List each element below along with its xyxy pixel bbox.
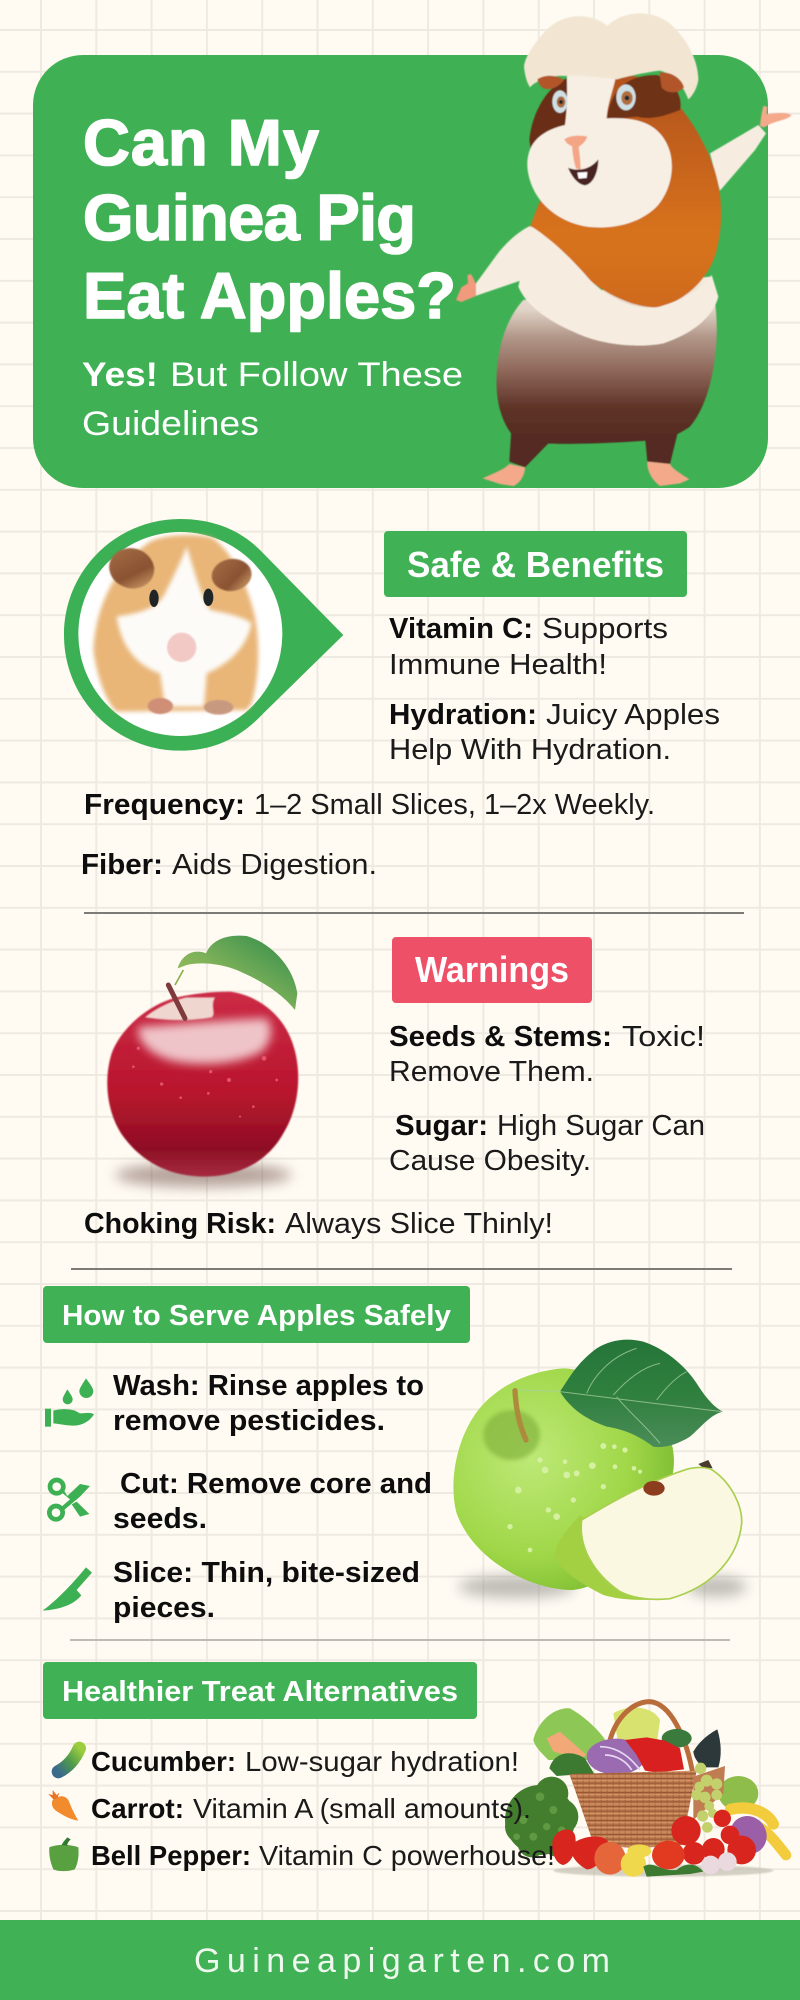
icon: scissors — [49, 1480, 90, 1519]
nose and muzzle — [564, 136, 587, 170]
warning: choking risk: Choking Risk: — [84, 1208, 276, 1240]
step: cut — [49, 1468, 432, 1535]
benefit: vitamin C: Supports — [542, 613, 668, 645]
lettuce — [533, 1708, 605, 1760]
step text: cut: Cut: Remove core and — [120, 1468, 432, 1500]
step text: slice: Slice: Thin, bite-sized — [113, 1557, 420, 1589]
warning: sugar: High Sugar Can — [497, 1110, 705, 1142]
leaf — [178, 936, 297, 1010]
step text: cut — [113, 1468, 432, 1535]
step text: wash: remove pesticides. — [113, 1405, 385, 1437]
panel: hero header — [33, 13, 792, 488]
step text: wash — [113, 1370, 424, 1437]
benefit: vitamin C — [389, 613, 668, 681]
inner greens — [613, 1708, 660, 1745]
heading: safe and benefits — [384, 531, 687, 597]
step: wash — [45, 1370, 424, 1437]
right arm — [710, 106, 792, 191]
orange tomato — [594, 1842, 626, 1875]
heading: warnings — [392, 937, 592, 1003]
icon: knife — [43, 1567, 92, 1611]
item: cucumber: Low-sugar hydration! — [245, 1746, 519, 1777]
right leg and foot — [645, 423, 689, 486]
item: cucumber: Cucumber: — [91, 1746, 236, 1777]
basket — [569, 1771, 697, 1848]
paws — [148, 698, 233, 715]
illustration: cartoon guinea pig — [456, 13, 792, 486]
apple body — [107, 992, 298, 1177]
benefit: vitamin C: Vitamin C: — [389, 613, 533, 645]
dark face patch right — [607, 75, 681, 120]
heading: alternatives: Healthier Treat Alternatives — [62, 1676, 458, 1708]
red peppers — [625, 1737, 684, 1773]
benefit: fiber: Aids Digestion. — [172, 849, 377, 881]
ears — [537, 72, 684, 92]
heading: safe and benefits: Safe & Benefits — [407, 544, 664, 585]
apple dimple — [483, 1410, 540, 1460]
guinea pig body — [93, 535, 258, 712]
purple cabbage right — [723, 1809, 774, 1861]
red cabbage — [587, 1739, 645, 1775]
apple shadow — [115, 1163, 292, 1187]
apple shadows — [458, 1575, 747, 1598]
subtitle: But Follow These — [170, 356, 463, 394]
benefit: frequency: Frequency: — [84, 789, 245, 821]
seed — [643, 1481, 665, 1496]
item: carrot: Carrot: — [91, 1793, 184, 1824]
title: Eat Apples? — [83, 259, 456, 332]
title: Can My — [83, 106, 319, 179]
icon: carrot — [48, 1790, 78, 1821]
footer — [0, 1920, 800, 2000]
icon: cucumber — [58, 1748, 79, 1772]
onions — [701, 1852, 737, 1874]
benefit: frequency: 1–2 Small Slices, 1–2x Weekly. — [254, 789, 655, 821]
item: bell pepper: Vitamin C powerhouse! — [259, 1840, 555, 1871]
mouth — [568, 159, 598, 185]
bananas — [731, 1808, 786, 1855]
eyes — [552, 84, 636, 113]
kale — [549, 1753, 594, 1776]
apple dimple — [145, 997, 215, 1020]
warning: sugar: Sugar: — [395, 1110, 488, 1142]
warning: sugar: Cause Obesity. — [389, 1145, 591, 1177]
panel: warnings — [84, 936, 705, 1240]
apple speckles — [132, 1047, 278, 1118]
benefit: hydration: Juicy Apples — [546, 699, 720, 731]
hero background — [33, 55, 768, 488]
icon: water and hand — [45, 1378, 94, 1427]
eyes — [149, 589, 213, 607]
back of head and shoulder — [530, 73, 721, 307]
heading: how to serve: How to Serve Apples Safely — [62, 1300, 451, 1332]
warning: choking risk: Always Slice Thinly! — [285, 1208, 553, 1240]
panel: healthier treat alternatives — [43, 1662, 786, 1877]
slice stem — [698, 1460, 713, 1468]
hair — [524, 13, 698, 99]
warning: seeds and stems: Toxic! — [622, 1021, 705, 1053]
step text: slice: pieces. — [113, 1592, 215, 1624]
title: Guinea Pig — [83, 181, 416, 254]
warning: seeds and stems: Seeds & Stems: — [389, 1021, 612, 1053]
leaf — [518, 1340, 723, 1447]
eggplant — [693, 1729, 721, 1767]
heading: how to serve — [43, 1286, 470, 1343]
warning: seeds and stems: Remove Them. — [389, 1056, 594, 1088]
panel: how to serve apples safely — [43, 1286, 747, 1624]
broccoli — [505, 1777, 578, 1857]
basket handle — [610, 1702, 693, 1777]
photo: red apple — [107, 936, 298, 1187]
subtitle: Guidelines — [82, 405, 259, 443]
large tomato — [652, 1841, 685, 1869]
white face — [527, 57, 672, 227]
dark face patch left — [529, 78, 577, 167]
heading: alternatives — [43, 1662, 477, 1719]
green cabbage right — [718, 1776, 758, 1811]
heading: warnings: Warnings — [415, 949, 569, 990]
tomatoes and peppers — [552, 1810, 756, 1869]
item: bell pepper — [91, 1840, 555, 1871]
stem — [168, 985, 185, 1018]
step text: cut: seeds. — [113, 1503, 207, 1535]
icon: bell pepper — [49, 1837, 79, 1871]
broccoli highlights — [513, 1792, 565, 1841]
warning: choking risk — [84, 1208, 553, 1240]
white blaze and cheeks — [117, 547, 252, 707]
basket shadow — [553, 1865, 773, 1877]
item: cucumber — [91, 1746, 519, 1777]
white chest band — [518, 227, 718, 346]
item: carrot: Vitamin A (small amounts). — [193, 1793, 531, 1824]
left arm — [456, 226, 557, 302]
basket side back — [693, 1766, 725, 1820]
carrots — [547, 1732, 587, 1758]
panel: safe and benefits — [64, 519, 720, 881]
warning: sugar — [389, 1110, 705, 1177]
nose — [167, 633, 196, 662]
photo: green apple with slice — [453, 1340, 747, 1600]
parsley base — [643, 1865, 703, 1877]
cucumber — [662, 1729, 692, 1748]
footer: Guineapigarten.com — [194, 1942, 610, 1980]
photo: vegetable basket — [505, 1702, 786, 1877]
photo: guinea pig in pin frame — [64, 519, 343, 751]
apple slice — [581, 1467, 742, 1599]
white photo circle — [78, 532, 282, 736]
slice rind — [555, 1515, 663, 1600]
benefit: vitamin C: Immune Health! — [389, 649, 607, 681]
stem — [515, 1391, 526, 1440]
subtitle: Yes! — [82, 356, 158, 394]
benefit: fiber: Fiber: — [81, 849, 163, 881]
warning: seeds and stems — [389, 1021, 705, 1088]
apple body — [453, 1368, 674, 1590]
step text: wash: Wash: Rinse apples to — [113, 1370, 424, 1402]
benefit: fiber — [81, 849, 377, 881]
step text: slice — [113, 1557, 420, 1624]
apple highlight — [138, 1018, 271, 1064]
subtitle — [82, 356, 463, 443]
item: bell pepper: Bell Pepper: — [91, 1840, 251, 1871]
lemons — [621, 1844, 651, 1877]
title — [83, 106, 456, 332]
left leg and foot — [483, 423, 552, 486]
benefit: hydration — [389, 699, 720, 766]
pin frame — [64, 519, 343, 751]
body — [496, 277, 717, 444]
apple speckles — [507, 1443, 642, 1552]
benefit: hydration: Help With Hydration. — [389, 734, 671, 766]
ears — [105, 543, 254, 594]
grapes — [691, 1763, 722, 1833]
step: slice — [43, 1557, 420, 1624]
benefit: hydration: Hydration: — [389, 699, 537, 731]
